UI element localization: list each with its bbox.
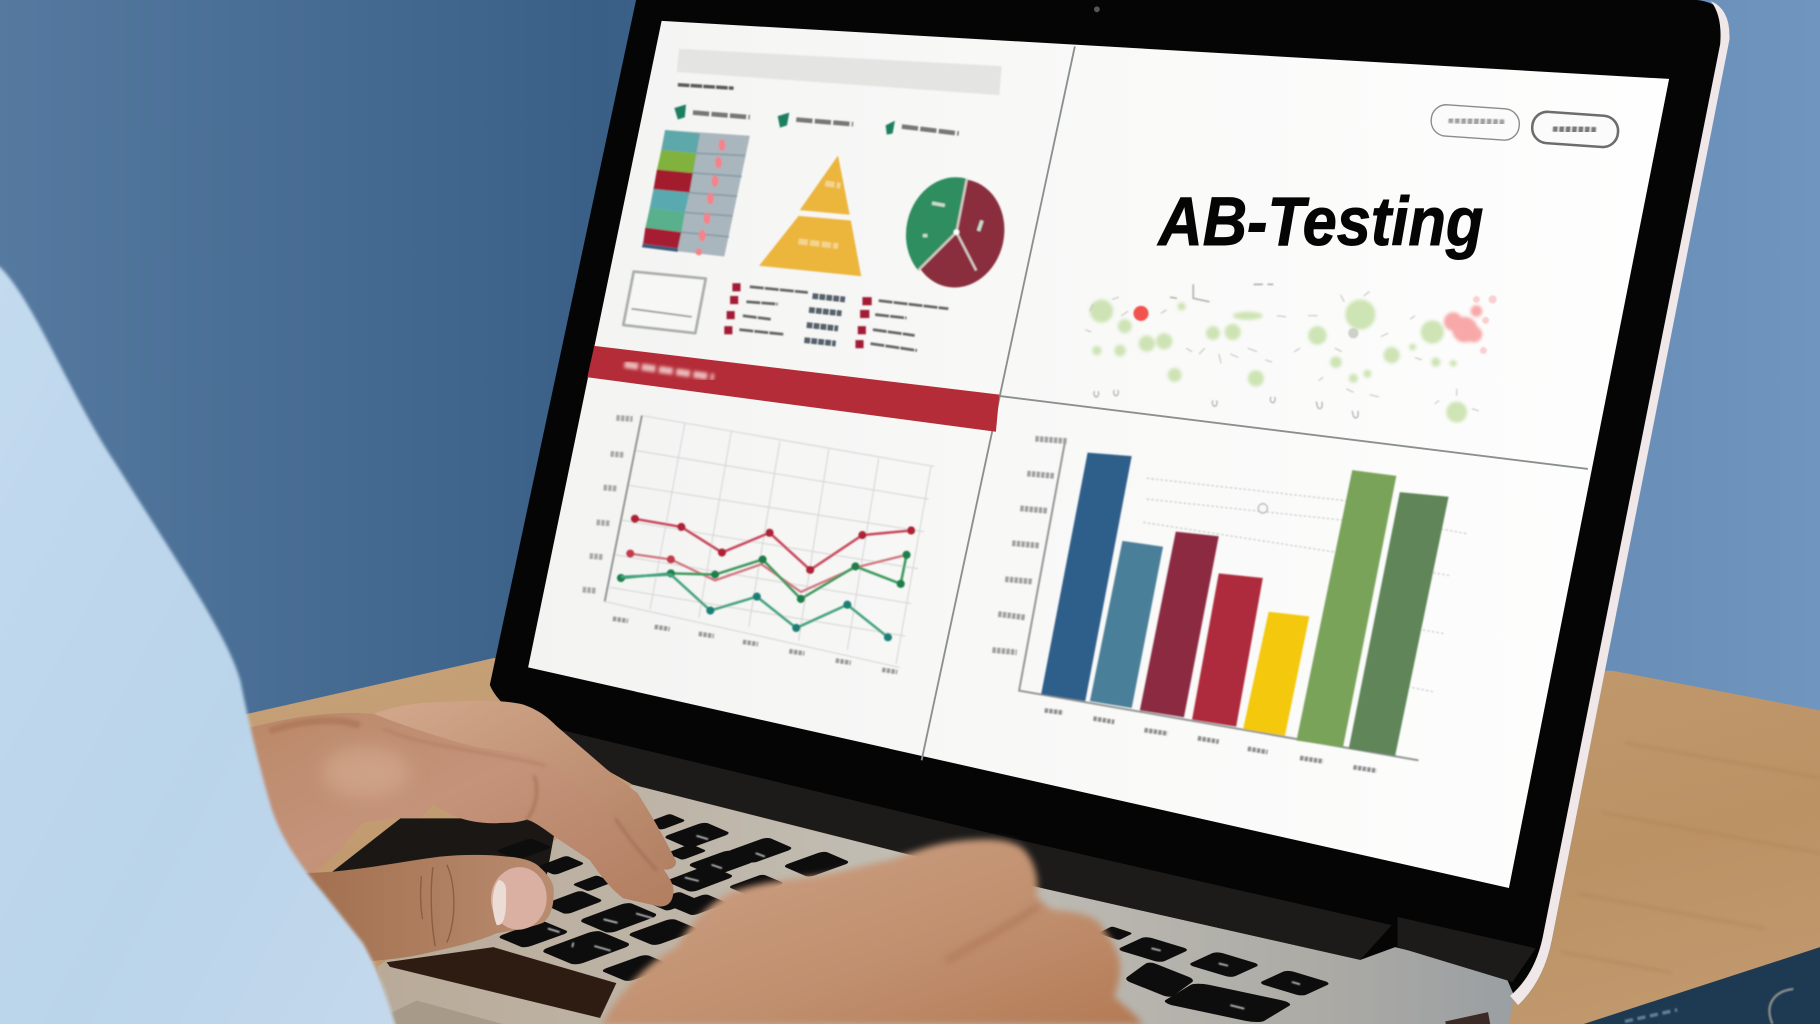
rear finger xyxy=(374,701,676,870)
bar chart x labels xyxy=(1045,710,1377,771)
webcam dot xyxy=(1094,6,1100,12)
lid silver edge xyxy=(1510,1,1730,1005)
panel header bar xyxy=(677,49,1002,95)
legend row xyxy=(674,104,959,135)
series: green xyxy=(617,551,911,603)
pyramid chart xyxy=(759,156,861,276)
wooden table xyxy=(232,658,1820,1024)
bar chart gridlines xyxy=(1143,478,1468,692)
right hand blurred xyxy=(601,839,1143,1024)
hand highlight xyxy=(322,746,410,797)
line chart y labels xyxy=(583,418,633,591)
line chart xyxy=(583,416,934,672)
bar 7 xyxy=(1349,492,1449,756)
series: pink xyxy=(626,550,907,592)
pie chart xyxy=(901,170,1014,296)
panel small heading xyxy=(678,85,734,88)
bar 4 xyxy=(1192,573,1263,727)
laptop lid with black bezel xyxy=(490,0,1729,1005)
bullet list right xyxy=(855,297,948,351)
bar 3 xyxy=(1140,532,1219,717)
pill button 1 xyxy=(1430,104,1520,141)
series: red xyxy=(631,515,915,574)
line chart axis xyxy=(605,416,642,601)
bar chart marker xyxy=(1258,504,1268,513)
bullet list left xyxy=(724,283,845,344)
laptop screen xyxy=(528,21,1669,888)
series: teal xyxy=(621,575,892,641)
shirt sleeve xyxy=(0,258,397,1024)
laptop hinge xyxy=(499,715,1536,982)
bar 6 xyxy=(1297,470,1396,748)
panel: top-left summary dashboard xyxy=(623,49,1014,351)
knuckle shading xyxy=(269,721,657,871)
notebook in corner xyxy=(1581,947,1820,1024)
left hand xyxy=(244,701,676,961)
pill button 2 xyxy=(1531,111,1619,148)
title: AB-Testing: AB-Testing xyxy=(1157,183,1483,260)
bar 1 xyxy=(1041,453,1132,701)
bar chart xyxy=(992,439,1468,771)
laptop keyboard xyxy=(331,814,1331,1024)
line chart x labels xyxy=(613,619,897,672)
red banner xyxy=(587,346,999,432)
back of hand and index finger xyxy=(244,713,674,907)
colour table xyxy=(642,130,750,257)
bar chart y labels xyxy=(992,439,1067,652)
bar 5 xyxy=(1243,612,1309,736)
thumb creases xyxy=(421,865,454,946)
scatter map of green and red clusters xyxy=(1085,284,1497,423)
line chart grid xyxy=(604,416,934,667)
bar chart axes xyxy=(1019,439,1418,760)
screen dividers xyxy=(922,46,1588,760)
laptop base and keyboard deck xyxy=(377,785,1515,1024)
bar 2 xyxy=(1090,541,1163,708)
thumb xyxy=(304,855,554,961)
thumbnail xyxy=(488,865,549,932)
outlined box xyxy=(623,272,706,333)
